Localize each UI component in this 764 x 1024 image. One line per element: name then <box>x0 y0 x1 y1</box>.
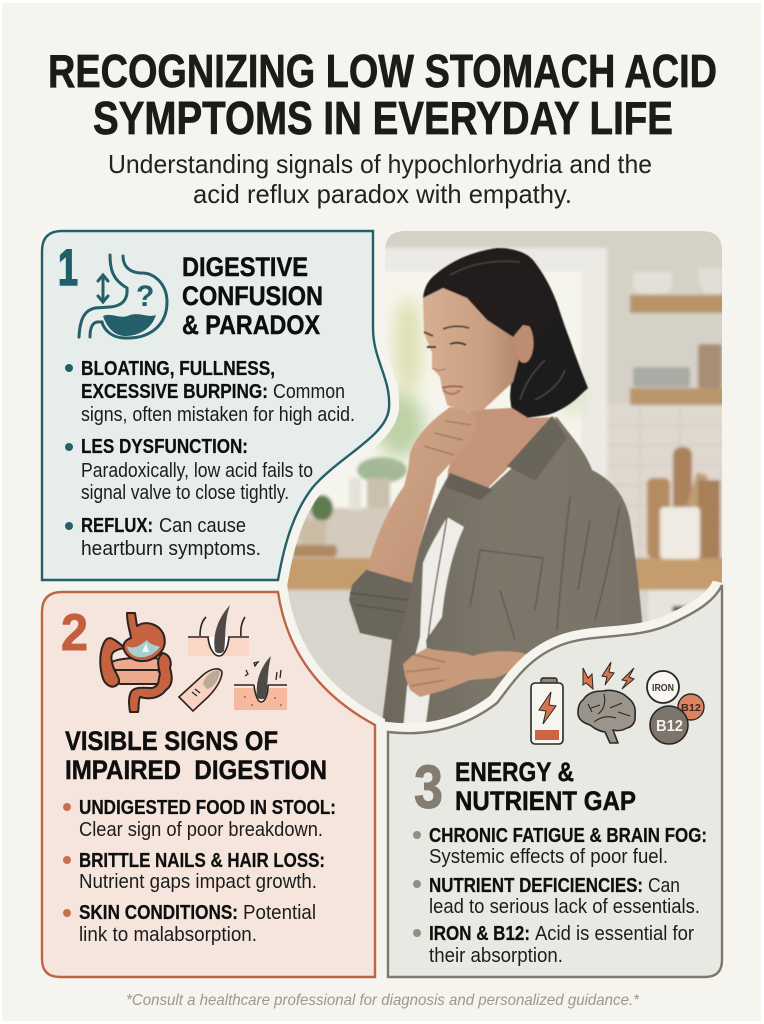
bullet list 2: link to malabsorption. <box>79 924 257 946</box>
bullet list 2: Nutrient gaps impact growth. <box>79 871 317 893</box>
bullet list 2: BRITTLE NAILS & HAIR LOSS: <box>79 850 325 872</box>
bullet list 2: Potential <box>243 902 316 924</box>
window greenery <box>376 297 581 457</box>
photo: woman in kitchen <box>287 231 722 724</box>
bullet list 1: EXCESSIVE BURPING: <box>81 381 268 403</box>
bullet list 3: CHRONIC FATIGUE & BRAIN FOG: <box>429 825 707 847</box>
number 2: 2 <box>61 604 88 662</box>
bullet list 1: LES DYSFUNCTION: <box>81 436 248 458</box>
hair back <box>509 302 589 419</box>
subtitle: Understanding signals of hypochlorhydria and the <box>108 149 652 179</box>
bullet list 1: Paradoxically, low acid fails to <box>81 460 313 482</box>
icon: iron and B12 circles: B12 <box>656 718 683 735</box>
heading 3: NUTRIENT GAP <box>455 786 636 816</box>
subtitle: acid reflux paradox with empathy. <box>193 179 572 209</box>
panel: digestive confusion and paradox <box>42 231 389 580</box>
white tee <box>403 517 464 730</box>
bullet list 1: signs, often mistaken for high acid. <box>81 404 355 426</box>
bullet list 2: Clear sign of poor breakdown. <box>79 819 323 841</box>
icon: iron and B12 circles: B12 <box>681 702 701 714</box>
icon: iron and B12 circles <box>647 671 704 744</box>
kitchen background <box>287 231 722 718</box>
bullet list 1: REFLUX: <box>81 515 153 537</box>
bullet list 2: UNDIGESTED FOOD IN STOOL: <box>79 797 336 819</box>
raised forearm and hand <box>367 407 477 583</box>
icon: brain with sparks <box>578 662 635 743</box>
heading 1: DIGESTIVE <box>182 252 308 282</box>
heading 2: IMPAIRED DIGESTION <box>65 755 327 785</box>
bullet list 1: BLOATING, FULLNESS, <box>81 358 275 380</box>
hair top <box>423 248 557 340</box>
woman figure <box>349 248 643 740</box>
collar and shirt folds <box>507 416 567 481</box>
panel 2 shape <box>42 592 375 977</box>
subtitle <box>108 149 652 209</box>
ear <box>514 323 534 363</box>
heading 1 <box>182 252 323 340</box>
number 1: 1 <box>58 239 78 296</box>
bullet list 3: lead to serious lack of essentials. <box>429 896 700 918</box>
shirt body <box>380 417 643 740</box>
footer disclaimer: *Consult a healthcare professional for diagnosis and personalized guidance.* <box>126 992 640 1009</box>
panel 1 shape <box>42 231 389 580</box>
bullet list 3: NUTRIENT DEFICIENCIES: <box>429 875 643 897</box>
face <box>423 285 524 412</box>
panel: energy and nutrient gap <box>388 585 722 977</box>
icon: iron and B12 circles: IRON <box>652 682 674 694</box>
number 3: 3 <box>414 753 443 821</box>
bullet list 2 <box>63 797 336 946</box>
heading 2: VISIBLE SIGNS OF <box>65 726 278 756</box>
bullet list 1 <box>65 358 355 560</box>
bullet list 1: heartburn symptoms. <box>81 538 261 560</box>
bullet list 1: signal valve to close tightly. <box>81 482 289 504</box>
bullet list 3: Acid is essential for <box>535 923 694 945</box>
facial features <box>424 326 469 394</box>
bullet list 2: SKIN CONDITIONS: <box>79 902 238 924</box>
heading 1: & PARADOX <box>182 310 320 340</box>
bullet list 1: Can cause <box>159 515 246 537</box>
heading 1: CONFUSION <box>182 281 323 311</box>
bullet list 3: IRON & B12: <box>429 923 530 945</box>
panel 3 shape <box>388 585 722 977</box>
question mark: ? <box>136 280 154 313</box>
bullet list 3: Can <box>648 875 680 897</box>
neck and chest <box>447 407 557 488</box>
icon: digestive tract <box>100 613 172 712</box>
icon: low battery <box>531 678 563 744</box>
icon: stomach with question mark <box>79 255 167 338</box>
bullet list 3: Systemic effects of poor fuel. <box>429 846 668 868</box>
bullet list 1: Common <box>273 381 345 403</box>
bullet list 3: their absorption. <box>429 945 563 967</box>
icon: brittle nail <box>179 669 222 711</box>
icon: flaky skin <box>234 656 287 710</box>
lower hand on stomach <box>403 648 527 697</box>
panel: visible signs of impaired digestion <box>42 592 375 977</box>
bullet list 3 <box>413 825 707 967</box>
icon: hair follicle <box>188 605 249 656</box>
heading 3 <box>455 757 636 816</box>
rolled sleeve <box>348 569 407 640</box>
title <box>48 45 717 144</box>
heading 2 <box>65 726 327 785</box>
heading 3: ENERGY & <box>455 757 574 787</box>
